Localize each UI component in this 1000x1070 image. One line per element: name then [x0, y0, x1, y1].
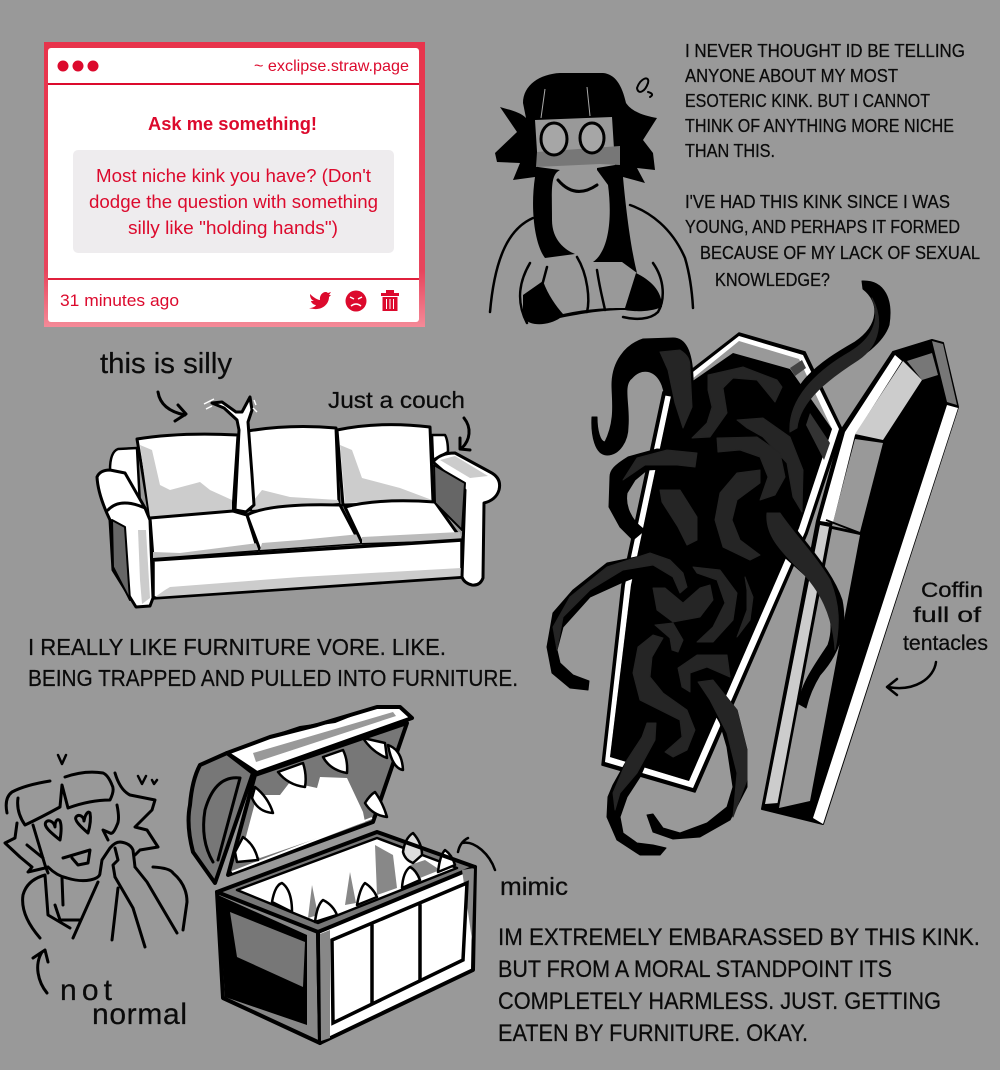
label: not normal: normal	[92, 998, 187, 1031]
card heading: Ask me something!	[148, 114, 317, 134]
text: furniture statement: BEING TRAPPED AND PULLED INTO FURNITURE.	[28, 665, 518, 691]
text: top right confession: ESOTERIC KINK. BUT I CANNOT	[685, 91, 930, 111]
text: furniture statement	[28, 634, 518, 691]
glasses	[541, 123, 604, 155]
text: top right confession: KNOWLEDGE?	[715, 270, 830, 290]
label: not normal	[60, 974, 187, 1031]
chest panels	[332, 883, 467, 1023]
lid interior	[228, 723, 407, 875]
tentacle: upper left curl	[592, 338, 693, 455]
label: coffin full of tentacles	[903, 579, 988, 655]
label: coffin full of tentacles: full of	[913, 604, 981, 627]
tentacles	[547, 281, 890, 855]
question box: dodge the question with something	[89, 192, 378, 212]
couch	[97, 397, 500, 607]
lid faces	[820, 355, 902, 523]
base	[153, 540, 462, 598]
arrow: to figure	[33, 950, 48, 993]
body	[23, 867, 187, 947]
blush	[536, 146, 620, 167]
timestamp: 31 minutes ago	[60, 292, 179, 310]
text: embarrassed statement	[498, 924, 980, 1047]
chest left face	[217, 892, 320, 1043]
chest right face	[318, 867, 475, 1043]
icon: bird	[309, 292, 331, 309]
panel: question card	[44, 42, 425, 327]
chin and hand	[48, 842, 135, 881]
text: top right confession	[685, 41, 980, 290]
label: just a couch: Just a couch	[328, 387, 465, 413]
icon: trash can	[381, 290, 399, 311]
text: top right confession: I NEVER THOUGHT ID BE TELLING	[685, 41, 965, 61]
arm emerging from cushions	[204, 397, 257, 512]
question box	[73, 150, 394, 253]
text: embarrassed statement: BUT FROM A MORAL STANDPOINT ITS	[498, 956, 892, 983]
upper teeth	[235, 738, 403, 862]
rear arm pieces	[110, 435, 448, 505]
site address: ~ exclipse.straw.page	[254, 58, 409, 75]
tentacle: bottom left	[607, 723, 666, 855]
lid top band	[227, 707, 412, 773]
arrow: to mimic	[458, 838, 495, 870]
lid side	[189, 753, 253, 883]
torso outline	[490, 205, 693, 323]
text: top right confession: I'VE HAD THIS KINK SINCE I WAS	[685, 192, 950, 212]
hair outline	[5, 772, 158, 873]
tentacle: left loop	[609, 449, 697, 540]
lower teeth	[272, 833, 455, 922]
arrow: to coffin	[887, 662, 936, 695]
label: mimic: mimic	[500, 873, 568, 901]
coffin lid	[762, 340, 958, 824]
text: embarrassed statement: EATEN BY FURNITURE. OKAY.	[498, 1020, 808, 1047]
icon: angry face	[346, 290, 366, 312]
seat cushions	[150, 501, 462, 558]
chest rim	[217, 832, 475, 932]
label: coffin full of tentacles: Coffin	[921, 579, 983, 602]
dark arcs	[633, 367, 803, 757]
label: not normal: not	[60, 974, 113, 1007]
label: coffin full of tentacles: tentacles	[903, 632, 988, 655]
hair	[495, 73, 657, 273]
mimic chest	[189, 707, 475, 1043]
back cushions	[137, 425, 433, 518]
text: top right confession: YOUNG, AND PERHAPS IT FORMED	[685, 217, 960, 237]
tentacle: lower left	[547, 553, 687, 690]
question box: Most niche kink you have? (Don't	[96, 166, 371, 186]
header dots	[58, 60, 98, 72]
heart eyes	[45, 812, 90, 840]
mouth	[63, 850, 90, 865]
right arm	[433, 453, 500, 585]
interior shadows	[308, 845, 440, 918]
text: embarrassed statement: COMPLETELY HARMLESS. JUST. GETTING	[498, 988, 941, 1015]
face	[535, 117, 615, 190]
question box: silly like "holding hands")	[128, 218, 338, 238]
chest interior	[237, 838, 457, 923]
arrow: to arm	[158, 392, 186, 421]
bangs highlights	[541, 87, 590, 118]
text: top right confession: THAN THIS.	[685, 141, 775, 161]
top right figure	[490, 73, 693, 324]
text: top right confession: THINK OF ANYTHING MORE NICHE	[685, 116, 954, 136]
text: top right confession: ANYONE ABOUT MY MOST	[685, 66, 898, 86]
sweat marks	[637, 78, 652, 97]
left arm	[97, 470, 153, 607]
tentacle: right side	[760, 508, 844, 708]
dark garment	[523, 273, 662, 324]
tentacle: bottom right	[647, 680, 747, 839]
open coffin base	[602, 333, 842, 792]
bottom left figure	[5, 755, 187, 947]
marks above head	[58, 755, 157, 784]
neck band	[558, 180, 597, 191]
arrow: to couch	[460, 418, 470, 450]
tentacle: upper right	[786, 281, 890, 432]
label: this is silly: this is silly	[100, 348, 233, 380]
text: furniture statement: I REALLY LIKE FURNITURE VORE. LIKE.	[28, 634, 446, 660]
text: top right confession: BECAUSE OF MY LACK OF SEXUAL	[700, 243, 980, 263]
